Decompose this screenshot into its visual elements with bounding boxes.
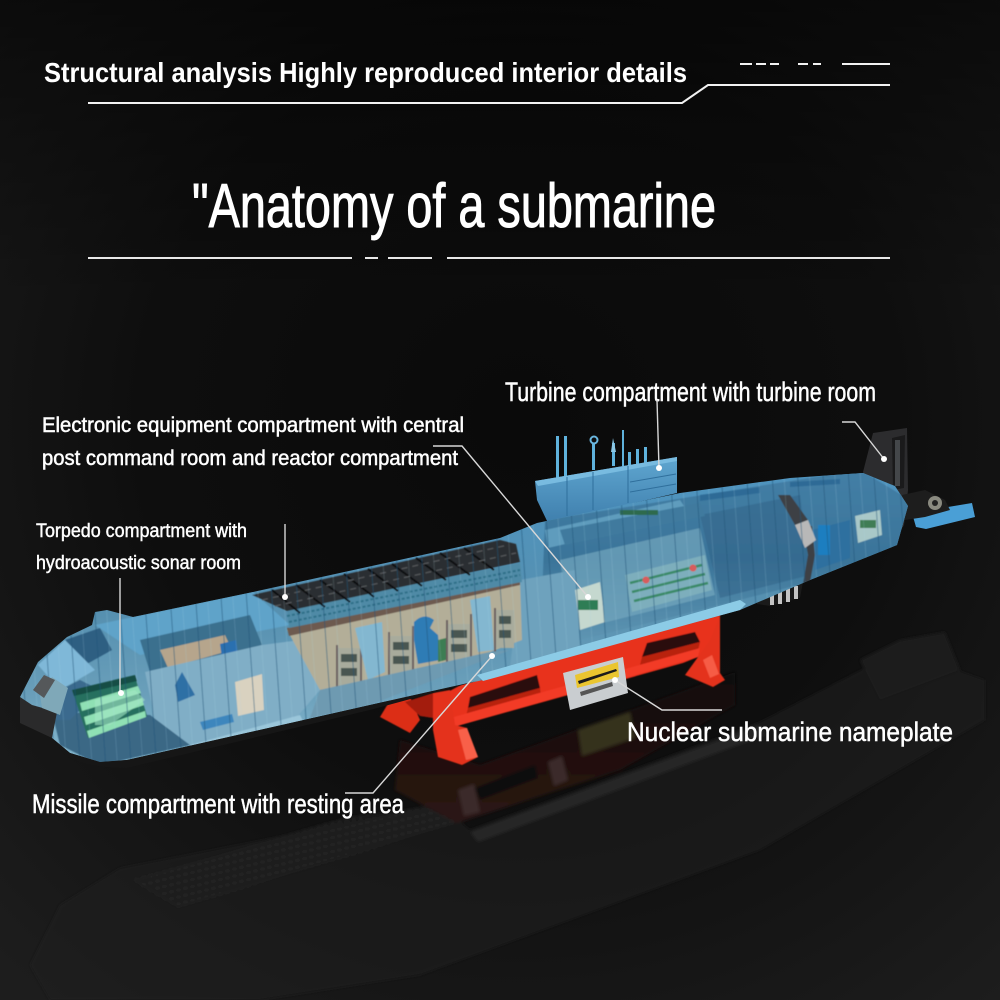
- label: torpedo compartment: [36, 521, 247, 696]
- label: tail leader: [842, 422, 887, 462]
- header rule with dashes: [88, 64, 890, 103]
- stern detail: [812, 520, 850, 570]
- big front leg: [433, 690, 478, 765]
- keel strip: [477, 600, 746, 681]
- control room: [140, 615, 262, 672]
- label: electronic equipment compartment: post command room and reactor compartment: [42, 447, 458, 470]
- tail fin and propeller: [902, 490, 975, 529]
- hull interior: [23, 473, 908, 762]
- hull body: [20, 473, 908, 762]
- label: missile hatch leader: [282, 524, 288, 600]
- label: missile compartment: Missile compartment with resting area: [32, 789, 405, 819]
- black nose cap: [20, 675, 68, 738]
- missile hatches: [252, 540, 520, 611]
- label: torpedo compartment: Torpedo compartment with: [36, 521, 247, 542]
- reactor equipment: [575, 582, 605, 630]
- submarine: [0, 428, 975, 780]
- nameplate: [563, 657, 628, 710]
- lower cabin floor: [310, 650, 510, 718]
- header: subtitle: Structural analysis Highly reproduced interior details: [44, 57, 687, 88]
- title: "Anatomy of a submarine: [192, 172, 716, 241]
- red display stand: [380, 615, 725, 765]
- hull bands: [778, 495, 808, 525]
- label: electronic equipment compartment: Electronic equipment compartment with central: [42, 414, 464, 437]
- resting cabin: [287, 580, 522, 690]
- sail with masts: [535, 430, 677, 523]
- submarine reflection: [30, 632, 985, 1000]
- left small leg: [380, 697, 420, 733]
- black keel edge: [52, 681, 477, 768]
- torpedo room: [72, 676, 147, 738]
- title rule: [88, 257, 890, 259]
- label: torpedo compartment: hydroacoustic sonar room: [36, 553, 241, 574]
- stand beam: [433, 615, 720, 728]
- label: missile compartment: [32, 653, 495, 819]
- missile tube rack: [287, 563, 522, 628]
- forward deck top: [95, 592, 290, 655]
- label: nameplate: Nuclear submarine nameplate: [627, 717, 953, 747]
- lower nose: [52, 712, 190, 765]
- rear section: [542, 473, 908, 630]
- rib overlay: [23, 474, 903, 762]
- upper pipes: [560, 503, 705, 545]
- label: electronic equipment compartment: [42, 414, 591, 600]
- label: turbine compartment: [505, 377, 876, 471]
- label: turbine compartment: Turbine compartment with turbine room: [505, 377, 876, 407]
- label: nameplate: [612, 677, 953, 747]
- right leg: [685, 615, 725, 687]
- crew figure: [414, 616, 440, 664]
- tail rudder: [863, 428, 908, 545]
- pump pod: [757, 582, 803, 606]
